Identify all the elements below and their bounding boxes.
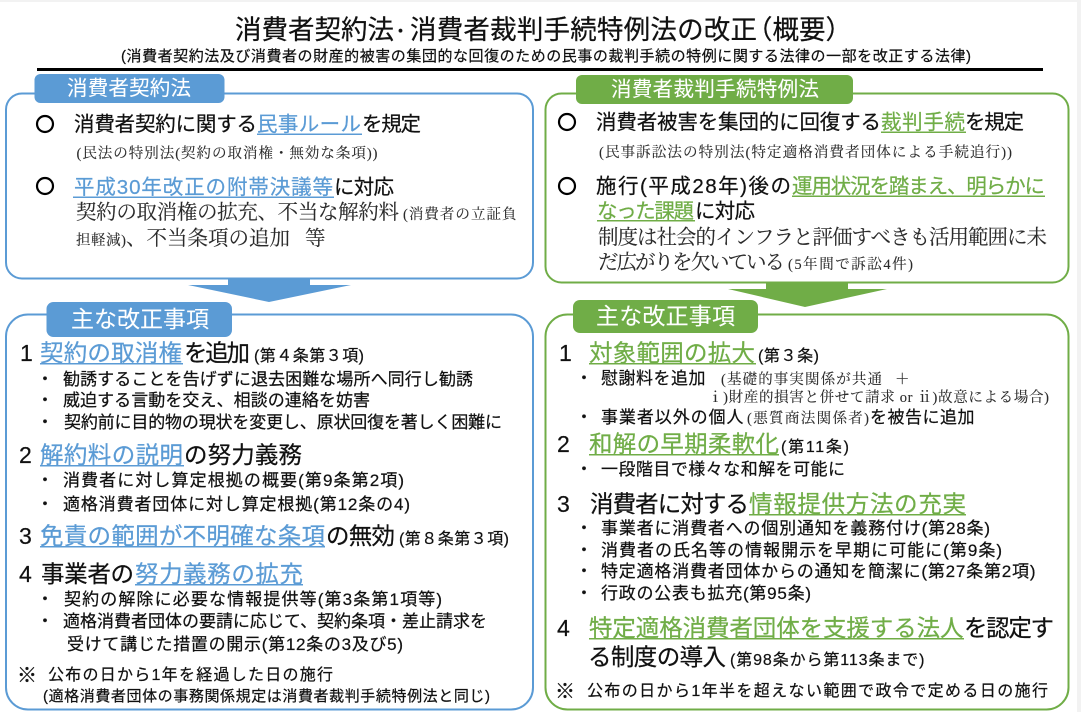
item: supplementary resolution: 、不当条項の追加: [126, 227, 290, 250]
item 3: enhanced information provision: ・: [576, 562, 592, 581]
item 2: duty to explain cancellation fee: ・: [36, 471, 54, 490]
item: operational issues: だ広がりを欠いている: [598, 251, 785, 274]
title: 消費者裁判手続特例法の改正: [410, 15, 757, 45]
item 4: expanded duty of effort: ・: [36, 590, 54, 609]
item: supplementary resolution: 担軽減): [76, 231, 126, 249]
item 1: expanded scope: ｉ)財産的損害と併せて請求 or ⅱ)故意による場合): [708, 388, 1049, 406]
item 1: expanded scope: 事業者以外の個人: [601, 408, 744, 427]
item 1: right of rescission: 契約前に目的物の現状を変更し、原状回復を著しく困難に: [64, 413, 502, 432]
item 4: certified support corporations: [557, 615, 1054, 670]
panel: consumer trial act overview: [546, 75, 1068, 282]
item 2: early flexible settlement: [557, 431, 849, 479]
item 3: enhanced information provision: 3: [557, 491, 570, 517]
item 1: right of rescission: 1: [20, 340, 33, 366]
item: civil rules: を規定: [362, 113, 421, 136]
item 4: expanded duty of effort: ・: [36, 612, 54, 631]
item 4: certified support corporations: 4: [557, 615, 570, 641]
item 2: early flexible settlement: ・: [576, 460, 592, 479]
item: civil rules: [37, 113, 421, 162]
item 2: duty to explain cancellation fee: 解約料の説明: [40, 442, 183, 468]
title: [235, 15, 852, 45]
item 4: expanded duty of effort: [19, 561, 487, 654]
item: civil rules: 民事ルール: [257, 113, 361, 136]
item 1: right of rescission: ・: [36, 370, 54, 389]
item 4: certified support corporations: を認定す: [964, 615, 1054, 641]
item 2: duty to explain cancellation fee: ・: [36, 495, 54, 514]
item 1: right of rescission: 威迫する言動を交え、相談の連絡を妨害: [63, 391, 370, 410]
note: effective date: (適格消費者団体の事務関係規定は消費者裁判手続特例法と同じ): [43, 688, 490, 705]
item: supplementary resolution: 等: [305, 227, 326, 250]
item 2: early flexible settlement: (第11条): [781, 438, 849, 456]
tab: consumer contract act: [34, 74, 224, 103]
item 4: expanded duty of effort: 4: [19, 561, 32, 587]
item: operational issues: 運用状況を踏まえ、明らかに: [792, 175, 1045, 198]
item: supplementary resolution: 平成30年改正の附帯決議等: [74, 176, 333, 199]
item: civil rules: 消費者契約に関する: [74, 113, 257, 136]
note: effective date: 公布の日から1年半を超えない範囲で政令で定める日の施行: [587, 682, 1048, 700]
item 1: right of rescission: を追加: [184, 340, 250, 366]
item 3: unclear exemption clauses: 免責の範囲が不明確な条項: [40, 523, 325, 549]
item: trial procedures: 消費者被害を集団的に回復する: [596, 111, 881, 134]
note: effective date: [17, 665, 490, 705]
item 3: unclear exemption clauses: [19, 523, 509, 549]
item 2: duty to explain cancellation fee: 2: [19, 442, 32, 468]
item 3: unclear exemption clauses: の無効: [326, 523, 395, 549]
subtitle: (消費者契約法及び消費者の財産的被害の集団的な回復のための民事の裁判手続の特例に関する法律の一部を改正する法律): [121, 48, 971, 65]
item 1: expanded scope: 慰謝料を追加: [601, 369, 706, 388]
item 1: expanded scope: (悪質商法関係者): [747, 409, 869, 427]
item 2: early flexible settlement: 一段階目で様々な和解を可能に: [601, 460, 845, 479]
item 1: right of rescission: 勧誘することを告げずに退去困難な場所へ同行し勧誘: [63, 370, 473, 389]
item 1: right of rescission: ・: [36, 413, 54, 432]
title: 消費者契約法: [235, 15, 394, 45]
item 4: certified support corporations: 特定適格消費者団体を支援する法人: [589, 615, 964, 641]
item 3: unclear exemption clauses: (第８条第３項): [399, 530, 509, 548]
item 3: enhanced information provision: 特定適格消費者団体からの通知を簡潔に(第27条第2項): [601, 562, 1036, 581]
arrow: blue down: [188, 279, 351, 302]
note: effective date: ※: [17, 665, 37, 687]
item 2: duty to explain cancellation fee: 適格消費者団体に対し算定根拠(第12条の4): [63, 495, 410, 514]
item 1: right of rescission: ・: [36, 391, 54, 410]
item 3: enhanced information provision: 消費者の氏名等の情報開示を早期に可能に(第9条): [601, 541, 1002, 560]
item: operational issues: 制度は社会的インフラと評価すべきも活用範囲に未: [598, 225, 1047, 249]
item 2: early flexible settlement: 2: [557, 431, 570, 457]
item 1: right of rescission: [20, 340, 502, 432]
item: civil rules: (民法の特別法(契約の取消権・無効な条項)): [76, 144, 378, 162]
item 2: early flexible settlement: 和解の早期柔軟化: [589, 431, 779, 457]
item 4: certified support corporations: る制度の導入: [588, 644, 726, 670]
item 1: expanded scope: ・: [576, 408, 592, 427]
tab: consumer contract act: 消費者契約法: [67, 77, 191, 100]
item 3: enhanced information provision: [557, 491, 1036, 603]
item 3: enhanced information provision: 行政の公表も拡充(第95条): [601, 584, 811, 603]
item 3: enhanced information provision: 情報提供方法の充実: [749, 491, 966, 517]
item 1: expanded scope: [559, 340, 1049, 427]
item: trial procedures: [559, 111, 1024, 161]
item 1: expanded scope: ＋: [895, 372, 910, 388]
item: operational issues: なった課題: [597, 200, 694, 223]
panel: main amendments, consumer trial act: [546, 300, 1068, 710]
item: operational issues: 施行(平成28年)後の: [596, 175, 791, 198]
item 4: expanded duty of effort: 適格消費者団体の要請に応じて、契約条項・差止請求を: [63, 612, 487, 631]
item 1: expanded scope: 1: [559, 340, 572, 366]
item: trial procedures: (民事訴訟法の特別法(特定適格消費者団体による手続追行)): [599, 143, 1012, 161]
item 1: expanded scope: (第３条): [758, 347, 819, 365]
item 3: unclear exemption clauses: 3: [19, 523, 32, 549]
tab: main amendments: [46, 302, 232, 337]
tab: consumer trial act: [576, 75, 853, 104]
item: operational issues: (5年間で訴訟4件): [788, 255, 913, 273]
title: ･: [395, 19, 406, 44]
item 1: right of rescission: (第４条第３項): [254, 347, 364, 365]
item: supplementary resolution: (消費者の立証負: [403, 205, 518, 223]
panel: consumer contract act overview: [6, 74, 533, 278]
tab: main amendments: 主な改正事項: [71, 306, 209, 332]
item: trial procedures: 裁判手続: [881, 111, 965, 134]
panel: main amendments, consumer contract act: [6, 302, 533, 710]
item 1: expanded scope: (基礎的事実関係が共通: [721, 370, 882, 388]
item 2: duty to explain cancellation fee: [19, 442, 410, 514]
item 4: expanded duty of effort: 契約の解除に必要な情報提供等(第3条第1項等): [64, 590, 442, 609]
item: operational issues: に対応: [695, 200, 755, 223]
item 4: expanded duty of effort: 受けて講じた措置の開示(第12条の3及び5): [67, 635, 403, 654]
item 1: right of rescission: 契約の取消権: [40, 340, 182, 366]
item 3: enhanced information provision: 消費者に対する: [590, 491, 749, 517]
item 2: duty to explain cancellation fee: 消費者に対し算定根拠の概要(第9条第2項): [63, 471, 404, 490]
item: supplementary resolution: [37, 176, 518, 250]
tab: main amendments: [573, 300, 758, 333]
item 4: certified support corporations: (第98条から第113条まで): [730, 651, 924, 669]
item 1: expanded scope: ・: [576, 369, 592, 388]
item 4: expanded duty of effort: 事業者の: [41, 561, 134, 587]
item 3: enhanced information provision: ・: [576, 541, 592, 560]
item 4: expanded duty of effort: 努力義務の拡充: [135, 561, 303, 587]
note: effective date: 公布の日から1年を経過した日の施行: [48, 666, 333, 684]
tab: consumer trial act: 消費者裁判手続特例法: [611, 78, 819, 101]
item 1: expanded scope: を被告に追加: [870, 408, 974, 427]
item: operational issues: [559, 175, 1047, 274]
item: supplementary resolution: 契約の取消権の拡充、不当な解約料: [76, 201, 400, 224]
item: supplementary resolution: に対応: [334, 176, 394, 199]
item 3: enhanced information provision: ・: [576, 519, 592, 538]
item 1: expanded scope: 対象範囲の拡大: [589, 340, 755, 366]
item 3: enhanced information provision: ・: [576, 584, 592, 603]
item: trial procedures: を規定: [965, 111, 1024, 134]
item 2: duty to explain cancellation fee: の努力義務: [184, 442, 302, 468]
arrow: green down: [728, 283, 887, 307]
item 3: enhanced information provision: 事業者に消費者への個別通知を義務付け(第28条): [601, 519, 990, 538]
title: （概要）: [746, 15, 852, 45]
tab: main amendments: 主な改正事項: [596, 303, 735, 329]
note: effective date: ※: [555, 681, 575, 703]
